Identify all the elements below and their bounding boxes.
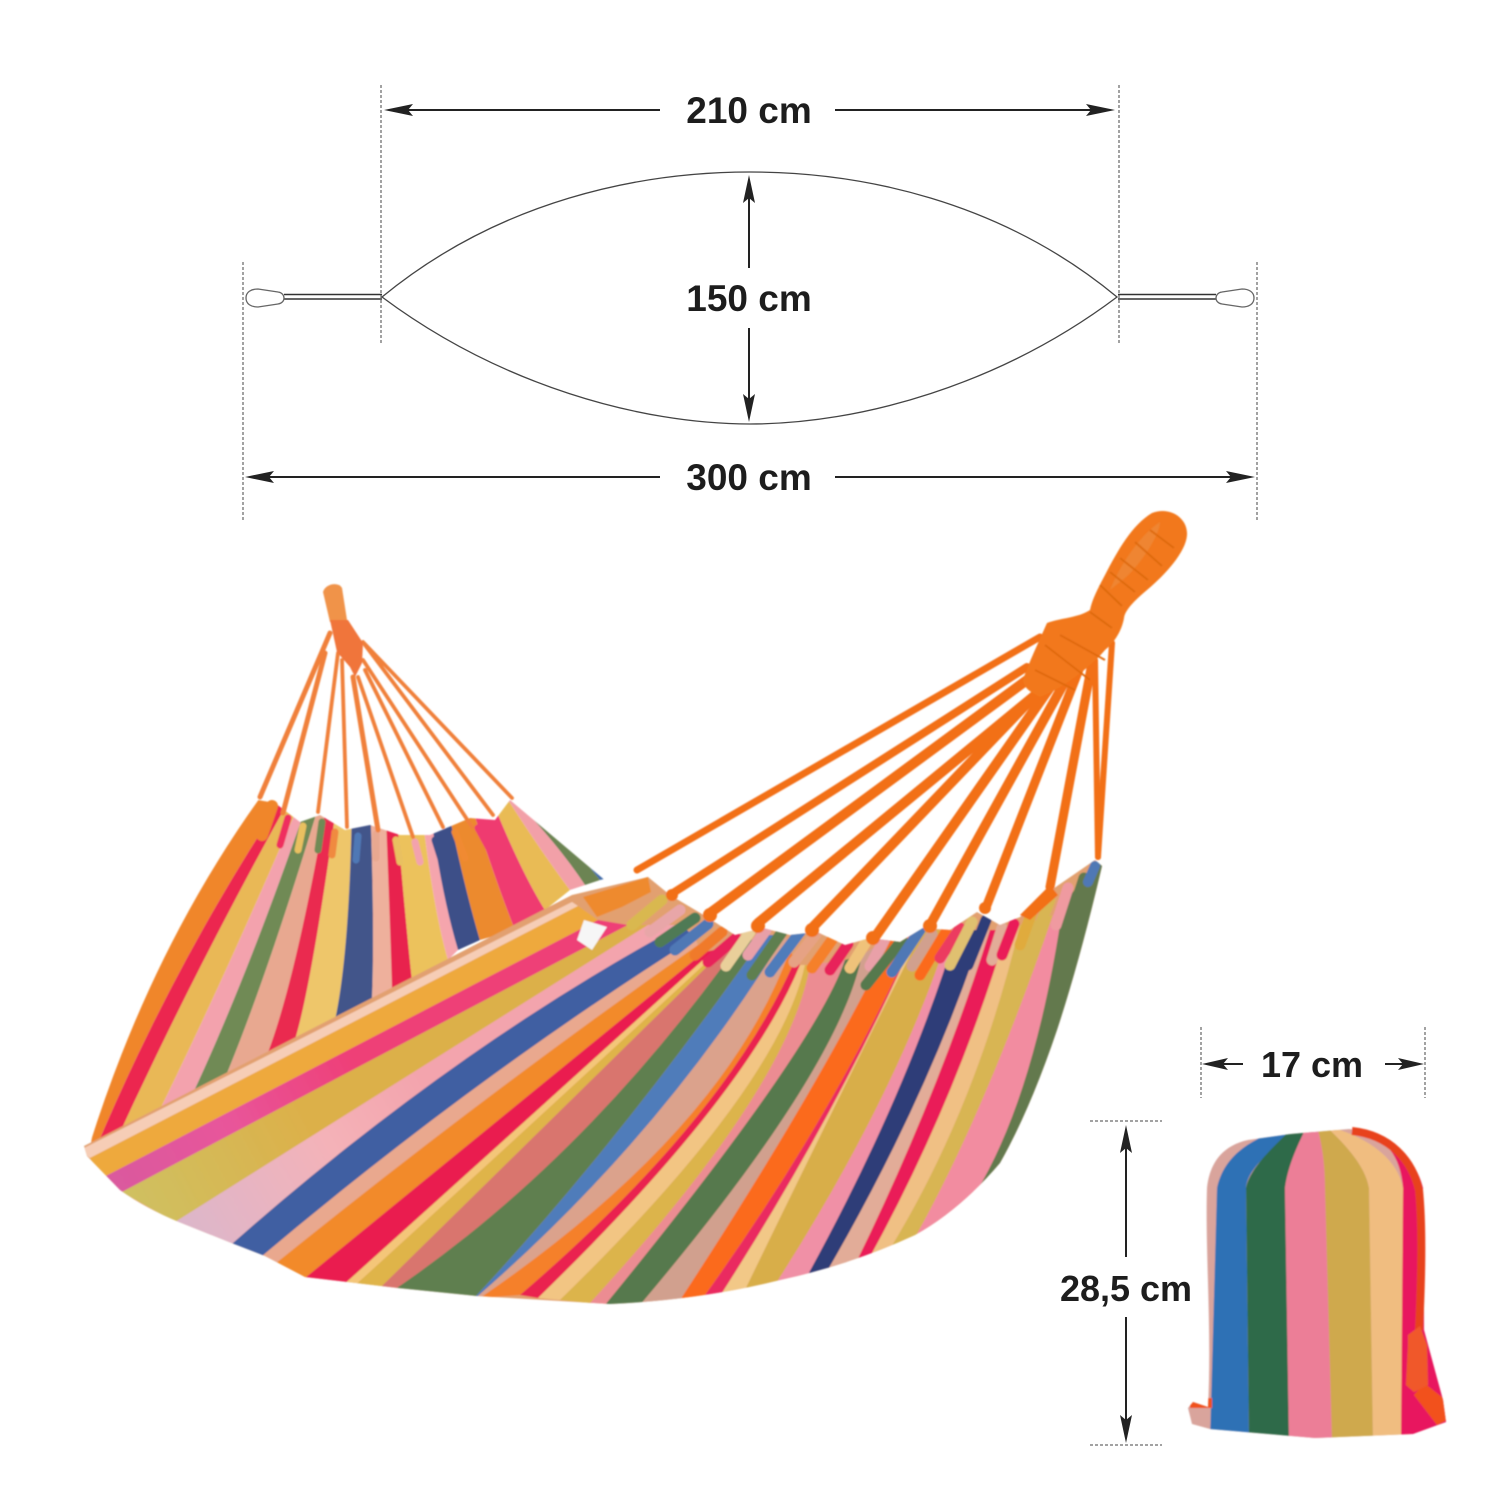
arrow: 300 cm length [245,471,1255,483]
label: 17 cm: 17 cm [1261,1044,1363,1085]
arrow: 210 cm width [384,104,1115,116]
guide lines [243,85,1257,522]
hammock photo illustration [60,511,1187,1320]
back gathered ruffles [262,806,490,862]
front gathered ruffles [632,866,1095,985]
hammock outline [382,172,1117,424]
right rope and loop [1118,289,1254,307]
label: 300 cm: 300 cm [686,457,812,498]
orange tab [583,877,651,917]
bag knot and tassel [1406,1326,1428,1392]
dimension diagram [243,85,1257,522]
rope end knots [666,885,1058,945]
arrow: 28,5 cm [1120,1125,1132,1443]
bag body [1187,1128,1447,1439]
bag drawstring [1352,1131,1421,1330]
label: 28,5 cm: 28,5 cm [1060,1268,1192,1309]
back fabric [90,799,604,1143]
left rope and loop [246,289,382,307]
left knot [323,584,363,677]
carry bag [1187,1126,1447,1439]
left ropes [260,633,512,837]
arrow: 150 cm height [743,175,755,422]
front fabric [60,850,1120,1320]
arrow: 17 cm [1202,1058,1424,1070]
carry bag dimensions [1060,1027,1425,1445]
label: 150 cm: 150 cm [686,278,812,319]
right knot and loop [1023,511,1187,697]
label: 210 cm: 210 cm [686,90,812,131]
right ropes [637,637,1112,940]
bag guide lines [1090,1027,1425,1445]
white label [577,920,607,950]
